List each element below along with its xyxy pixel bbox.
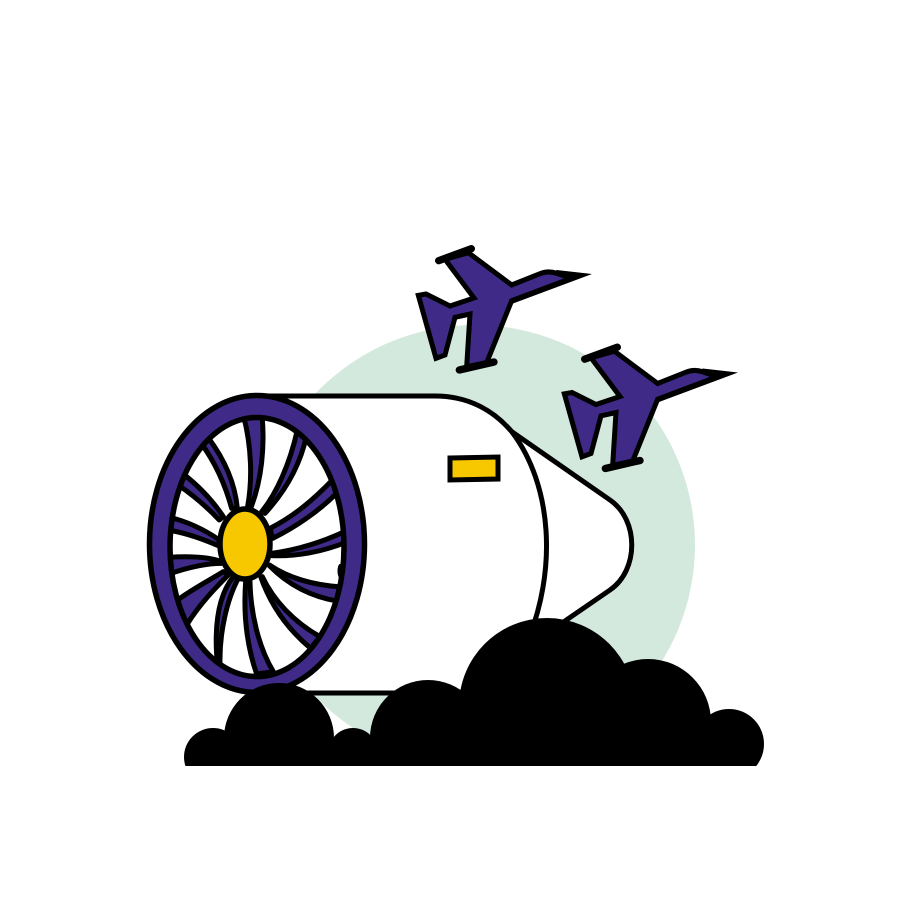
plane 2 — [564, 347, 738, 468]
plane 1 body — [418, 253, 573, 367]
plane 2 nose tip — [658, 368, 738, 402]
black smoke clouds — [184, 618, 764, 766]
plane 2 upper wing tip — [585, 347, 617, 359]
fan hub — [220, 509, 270, 579]
fan assembly — [150, 396, 364, 692]
fan blades — [168, 415, 347, 674]
plane 1 — [418, 249, 592, 370]
plane 1 lower wing tip — [459, 362, 494, 370]
background green circle — [255, 325, 695, 765]
ring notch — [338, 564, 342, 578]
plane 1 upper wing tip — [439, 249, 471, 261]
plane 1 nose tip — [512, 270, 592, 304]
engine cone — [505, 427, 632, 645]
fan outer ring — [150, 396, 364, 692]
yellow hatch — [450, 457, 498, 480]
plane 2 body — [564, 351, 719, 465]
engine nacelle body — [257, 396, 547, 693]
fan inner disc — [170, 418, 344, 676]
illustration: jet engine with planes — [146, 245, 764, 766]
plane 2 lower wing tip — [605, 460, 640, 468]
